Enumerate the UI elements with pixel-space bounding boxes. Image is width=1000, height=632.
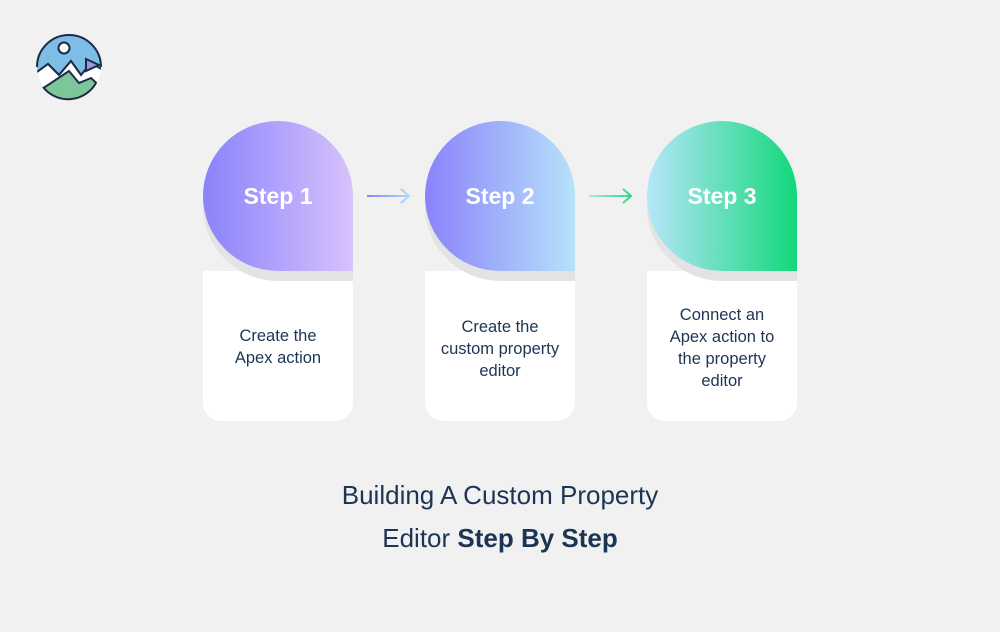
step 3 text: editor	[701, 372, 743, 390]
title: Editor Step By Step	[382, 523, 618, 553]
step 2 text: Create the	[461, 318, 539, 336]
step 3 text: the property	[678, 350, 766, 368]
step 2 header	[425, 121, 575, 271]
step 1 text: Create the	[239, 327, 317, 345]
step 1 header	[203, 121, 353, 271]
step 2 text: editor	[479, 362, 521, 380]
step 1 header: Step 1	[243, 182, 313, 208]
title: Building A Custom Property	[342, 480, 658, 510]
step 2 text	[441, 318, 560, 380]
step 3 text: Connect an	[680, 306, 764, 324]
step 2 header: Step 2	[465, 182, 535, 208]
step 3 text	[670, 306, 774, 390]
step 3 text: Apex action to	[670, 328, 774, 346]
arrow 2	[589, 188, 632, 204]
step 1 text: Apex action	[235, 349, 321, 367]
step 1 card	[203, 121, 353, 421]
step 3 header	[647, 121, 797, 271]
step 3 header: Step 3	[687, 182, 757, 208]
arrow 1	[367, 188, 410, 204]
step 2 text: custom property	[441, 340, 559, 358]
step 1 text	[235, 327, 321, 367]
step 2 card	[425, 121, 575, 421]
logo	[36, 34, 102, 100]
step 3 card	[647, 121, 797, 421]
title	[342, 480, 658, 553]
